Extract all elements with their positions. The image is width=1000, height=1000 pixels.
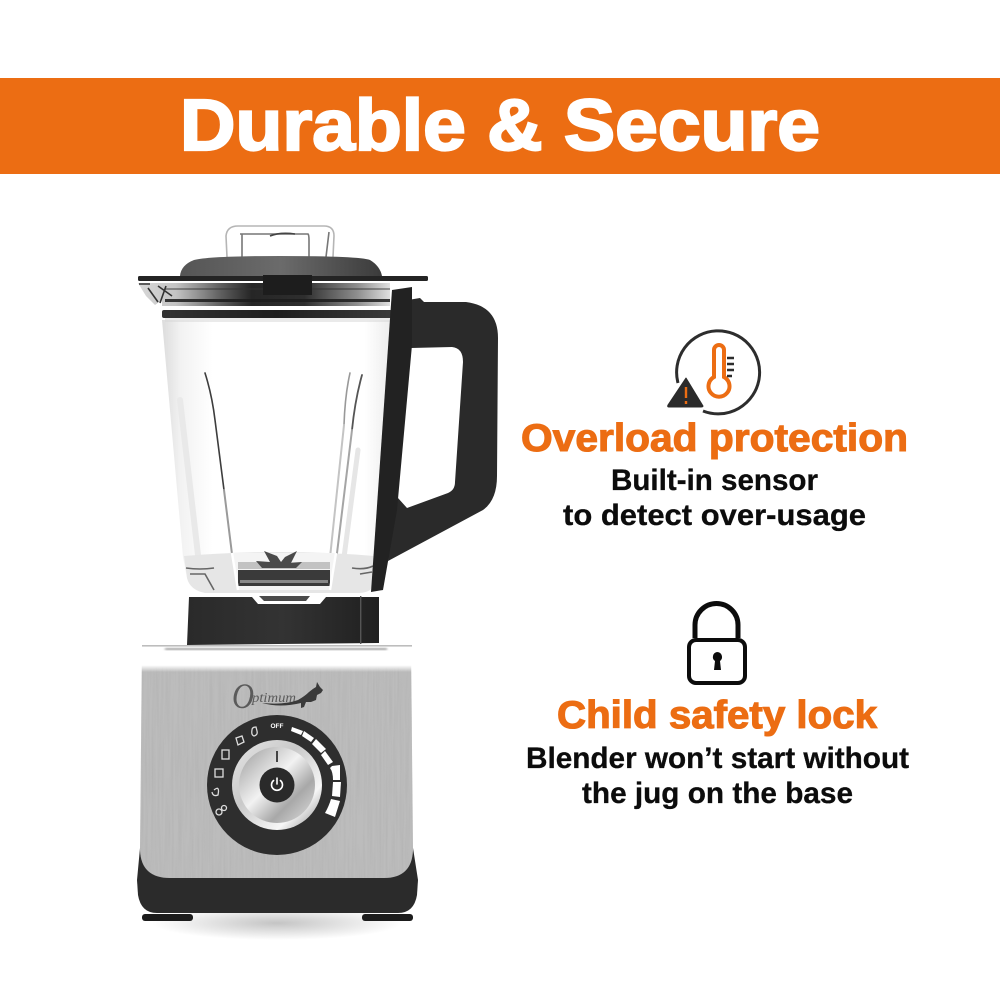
blender product image: [137, 226, 498, 940]
feature: child safety lock: [526, 694, 909, 810]
program icons: [212, 727, 257, 815]
glass flutes: [180, 373, 362, 586]
brand logo: ptimum: [251, 691, 296, 706]
heading: Overload protection: [521, 417, 908, 460]
silver knob: [232, 740, 322, 830]
motor collar: [187, 596, 379, 645]
description: [526, 742, 909, 810]
power button: [260, 768, 294, 802]
description: to detect over-usage: [563, 499, 866, 532]
header banner: [0, 78, 1000, 174]
speed bars: [291, 727, 341, 817]
lid top clear cap: [226, 226, 334, 257]
description: Built-in sensor: [611, 464, 818, 497]
icon: overload thermometer: [668, 331, 760, 414]
brushed steel panel: [140, 645, 413, 878]
base body: [137, 645, 418, 921]
feature: overload protection: [521, 417, 908, 532]
ticks: [727, 358, 734, 376]
warning triangle: [668, 378, 703, 407]
glass base and blade: [184, 551, 374, 593]
keyhole: [713, 652, 722, 670]
description: [563, 464, 866, 532]
title: Durable & Secure: [180, 86, 820, 166]
jug handle: [388, 298, 498, 561]
panel highlight: [141, 645, 413, 672]
jug handle strip: [371, 287, 412, 592]
thermometer: [709, 345, 730, 397]
floor shadow: [152, 906, 402, 940]
jar lid band: [138, 275, 428, 322]
black foot housing: [137, 848, 418, 913]
description: Blender won’t start without: [526, 742, 909, 775]
control dial: [207, 715, 347, 855]
exclamation mark: [685, 387, 687, 404]
description: the jug on the base: [582, 777, 853, 810]
power icon: [272, 778, 282, 790]
brand logo: [232, 676, 323, 716]
black lid: [180, 256, 382, 276]
heading: Child safety lock: [557, 694, 877, 737]
OFF label: OFF: [270, 723, 284, 730]
glass jar: [162, 320, 392, 593]
feet: [142, 914, 193, 921]
brand logo: O: [232, 676, 254, 716]
icon: padlock: [689, 604, 745, 683]
